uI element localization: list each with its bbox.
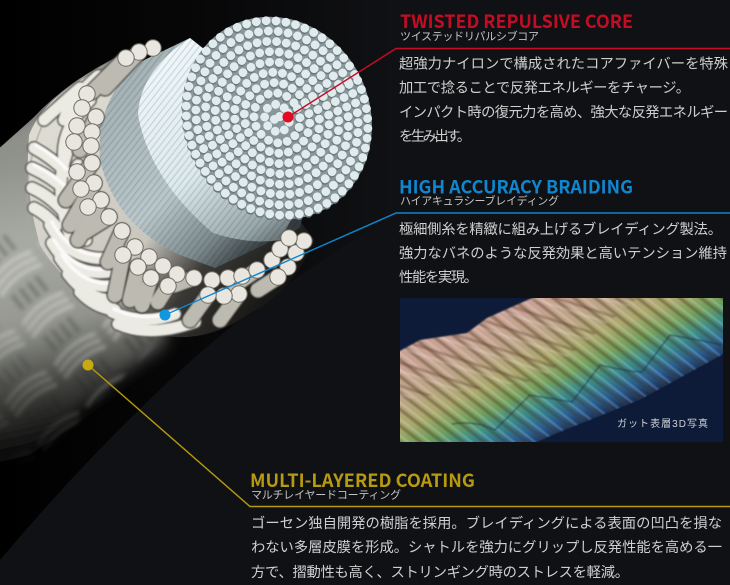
- body text: 超強力ナイロンで構成されたコアファイバーを特殊: [399, 56, 728, 72]
- illustration: gut cross section: [0, 16, 372, 462]
- coating rim: [27, 52, 135, 225]
- core end face: fibre rings: [149, 0, 405, 251]
- body text: 性能を実現。: [399, 269, 478, 286]
- body text: を生み出す。: [399, 128, 471, 145]
- core twisted section: [138, 38, 330, 241]
- section: twisted repulsive core: [399, 8, 728, 145]
- core stripes: [100, 38, 320, 268]
- body text: [399, 56, 728, 145]
- katakana subheading: マルチレイヤードコーティング: [251, 488, 401, 502]
- section: multi-layered coating: [250, 467, 722, 581]
- callout leader: coating: [82, 360, 730, 506]
- photo caption: ガット表層3D写真: [617, 417, 708, 430]
- body text: インパクト時の復元力を高め、強大な反発エネルギー: [399, 104, 728, 121]
- body text: 加工で捻ることで反発エネルギーをチャージ。: [399, 80, 690, 96]
- 3D surface photo: [398, 296, 725, 444]
- heading: HIGH ACCURACY BRAIDING: [399, 174, 633, 200]
- braided strands: [32, 76, 195, 331]
- outer multi-layered coating: [0, 40, 165, 510]
- body text: わない多層皮膜を形成。シャトルを強力にグリップし反発性能を高める一: [251, 539, 722, 556]
- body text: [251, 514, 722, 581]
- section: high accuracy braiding: [399, 174, 727, 286]
- heading: MULTI-LAYERED COATING: [250, 467, 475, 493]
- braid wire ends: [66, 40, 312, 304]
- body text: 極細側糸を精緻に組み上げるブレイディング製法。: [399, 220, 722, 238]
- heading: TWISTED REPULSIVE CORE: [400, 8, 633, 34]
- body text: [399, 220, 727, 286]
- body text: 方で、摺動性も高く、ストリンギング時のストレスを軽減。: [251, 564, 629, 581]
- black swoosh backdrop: [0, 0, 395, 560]
- callout leader: braiding: [160, 213, 730, 320]
- katakana subheading: ハイアキュラシーブレイディング: [400, 194, 559, 208]
- body text: ゴーセン独自開発の樹脂を採用。ブレイディングによる表面の凹凸を損な: [251, 514, 722, 532]
- body text: 強力なバネのような反発効果と高いテンション維持: [399, 245, 727, 262]
- katakana subheading: ツイステッドリパルシブコア: [400, 29, 539, 43]
- core cylinder: [100, 38, 320, 268]
- callout leader: twisted repulsive core: [282, 48, 730, 122]
- braid layer base: [28, 60, 315, 337]
- braid wire tails: [66, 52, 278, 320]
